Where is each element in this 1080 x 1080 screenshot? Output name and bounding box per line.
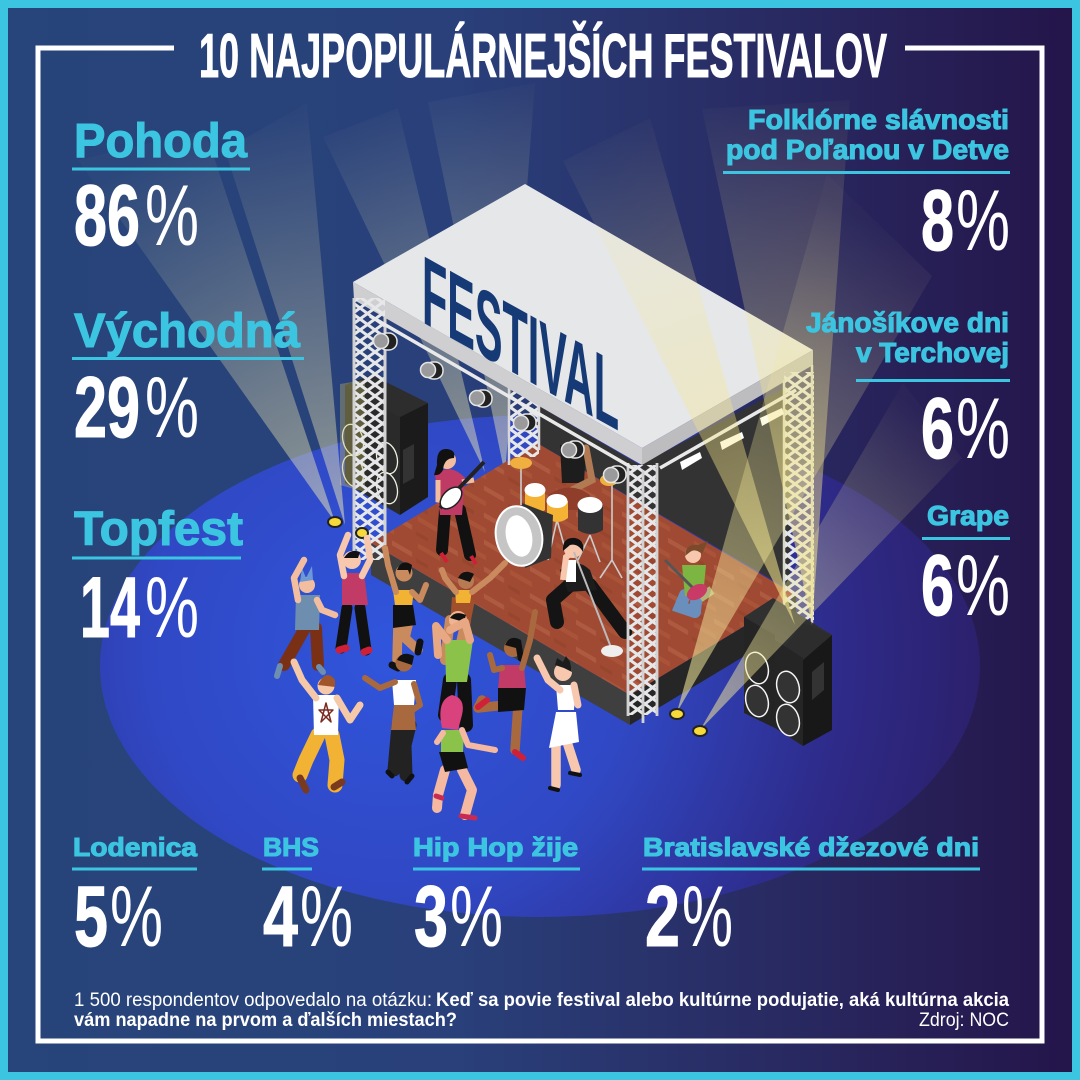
stat: Jánošíkove dni: v Terchovej (856, 337, 1009, 368)
right loudspeakers (742, 598, 832, 746)
stat: Hip Hop žije: Hip Hop žije (413, 832, 578, 862)
stat: Bratislavské džezové dni: % (682, 869, 733, 965)
ground lights (328, 517, 707, 736)
left loudspeaker (339, 375, 428, 515)
stat: Hip Hop žije (413, 832, 580, 965)
survey footnote: Zdroj: NOC (919, 1010, 1009, 1031)
stat: Pohoda: Pohoda (74, 115, 247, 168)
stat: BHS: % (300, 869, 353, 965)
stat: BHS: 4 (263, 869, 298, 965)
foreground spotlight beams (78, 100, 962, 730)
stat: Grape: 6 (921, 538, 954, 634)
stat: Jánošíkove dni: 6 (921, 381, 954, 477)
stage roof with FESTIVAL text (353, 184, 813, 465)
dancing crowd (277, 535, 580, 818)
pink haired dancer (436, 695, 495, 818)
survey footnote: Keď sa povie festival alebo kultúrne podujatie, aká kultúrna akcia (436, 990, 1009, 1011)
kneeling guitarist (665, 541, 712, 612)
back spotlight beams (323, 83, 535, 475)
stat: Grape: % (956, 538, 1010, 634)
stat: Jánošíkove dni: Jánošíkove dni (806, 307, 1009, 338)
stat: Topfest: 14 (80, 560, 140, 656)
stat: Topfest: % (145, 560, 199, 656)
drum kit and drummer (490, 445, 622, 578)
stat: Východná (72, 305, 304, 456)
stat: Jánošíkove dni: % (956, 381, 1010, 477)
stat: Lodenica: 5 (74, 869, 108, 965)
middle truss tower (509, 385, 539, 465)
stat: Folklórne slávnosti: Folklórne slávnosti (748, 104, 1009, 135)
stage roof with FESTIVAL text: FESTIVAL (422, 235, 619, 453)
survey footnote (74, 990, 1009, 1031)
dancer in pink shirt (478, 612, 535, 758)
lighting rails (370, 316, 796, 470)
man in green shirt (436, 611, 473, 725)
dancer in yellow top (385, 548, 426, 668)
stat: Folklórne slávnosti (723, 104, 1010, 269)
dancer in pink top (339, 535, 370, 652)
stat: Folklórne slávnosti: pod Poľanou v Detve (726, 134, 1009, 165)
stat: Grape: Grape (927, 500, 1009, 531)
stat: BHS (262, 832, 353, 965)
stage back wall (537, 385, 790, 590)
stat: Topfest (72, 503, 243, 656)
survey footnote: 1 500 respondentov odpovedalo na otázku: (74, 990, 432, 1011)
dancer on stage edge (442, 563, 505, 670)
stage side faces (371, 543, 796, 725)
survey footnote: vám napadne na prvom a ďalších miestach? (74, 1010, 457, 1031)
singer with microphone (553, 538, 625, 657)
stat: Hip Hop žije: 3 (414, 869, 448, 965)
dancer in white tank and black pants (365, 654, 420, 782)
stat: Bratislavské džezové dni (642, 832, 980, 965)
man with star tank top (294, 662, 360, 790)
stage lamps (374, 333, 784, 483)
guitar player on the stage (434, 449, 484, 564)
stat: BHS: BHS (263, 832, 319, 862)
stat: Hip Hop žije: % (450, 869, 503, 965)
stat: Grape (921, 500, 1010, 634)
stat: Folklórne slávnosti: % (956, 173, 1010, 269)
truss towers (354, 298, 814, 723)
stat: Východná: Východná (74, 305, 300, 358)
stat: Bratislavské džezové dni: Bratislavské džezové dni (643, 832, 979, 862)
glowing stage floor ellipse (100, 415, 980, 917)
stat: Lodenica: Lodenica (73, 832, 198, 862)
stat: Folklórne slávnosti: 8 (921, 173, 954, 269)
stat: Východná: % (145, 360, 199, 456)
stat: Lodenica: % (110, 869, 163, 965)
stat: Pohoda: 86 (74, 168, 140, 264)
dancer in white dress (537, 656, 580, 790)
stat: Lodenica (72, 832, 198, 965)
stat: Jánošíkove dni (806, 307, 1010, 477)
stat: Pohoda: % (145, 168, 199, 264)
stat: Východná: 29 (74, 360, 140, 456)
stage wooden floor (371, 443, 796, 695)
stat: Topfest: Topfest (74, 503, 243, 556)
dancer with blue mohawk (277, 560, 335, 676)
stat: Bratislavské džezové dni: 2 (645, 869, 680, 965)
stat: Pohoda (72, 115, 250, 264)
